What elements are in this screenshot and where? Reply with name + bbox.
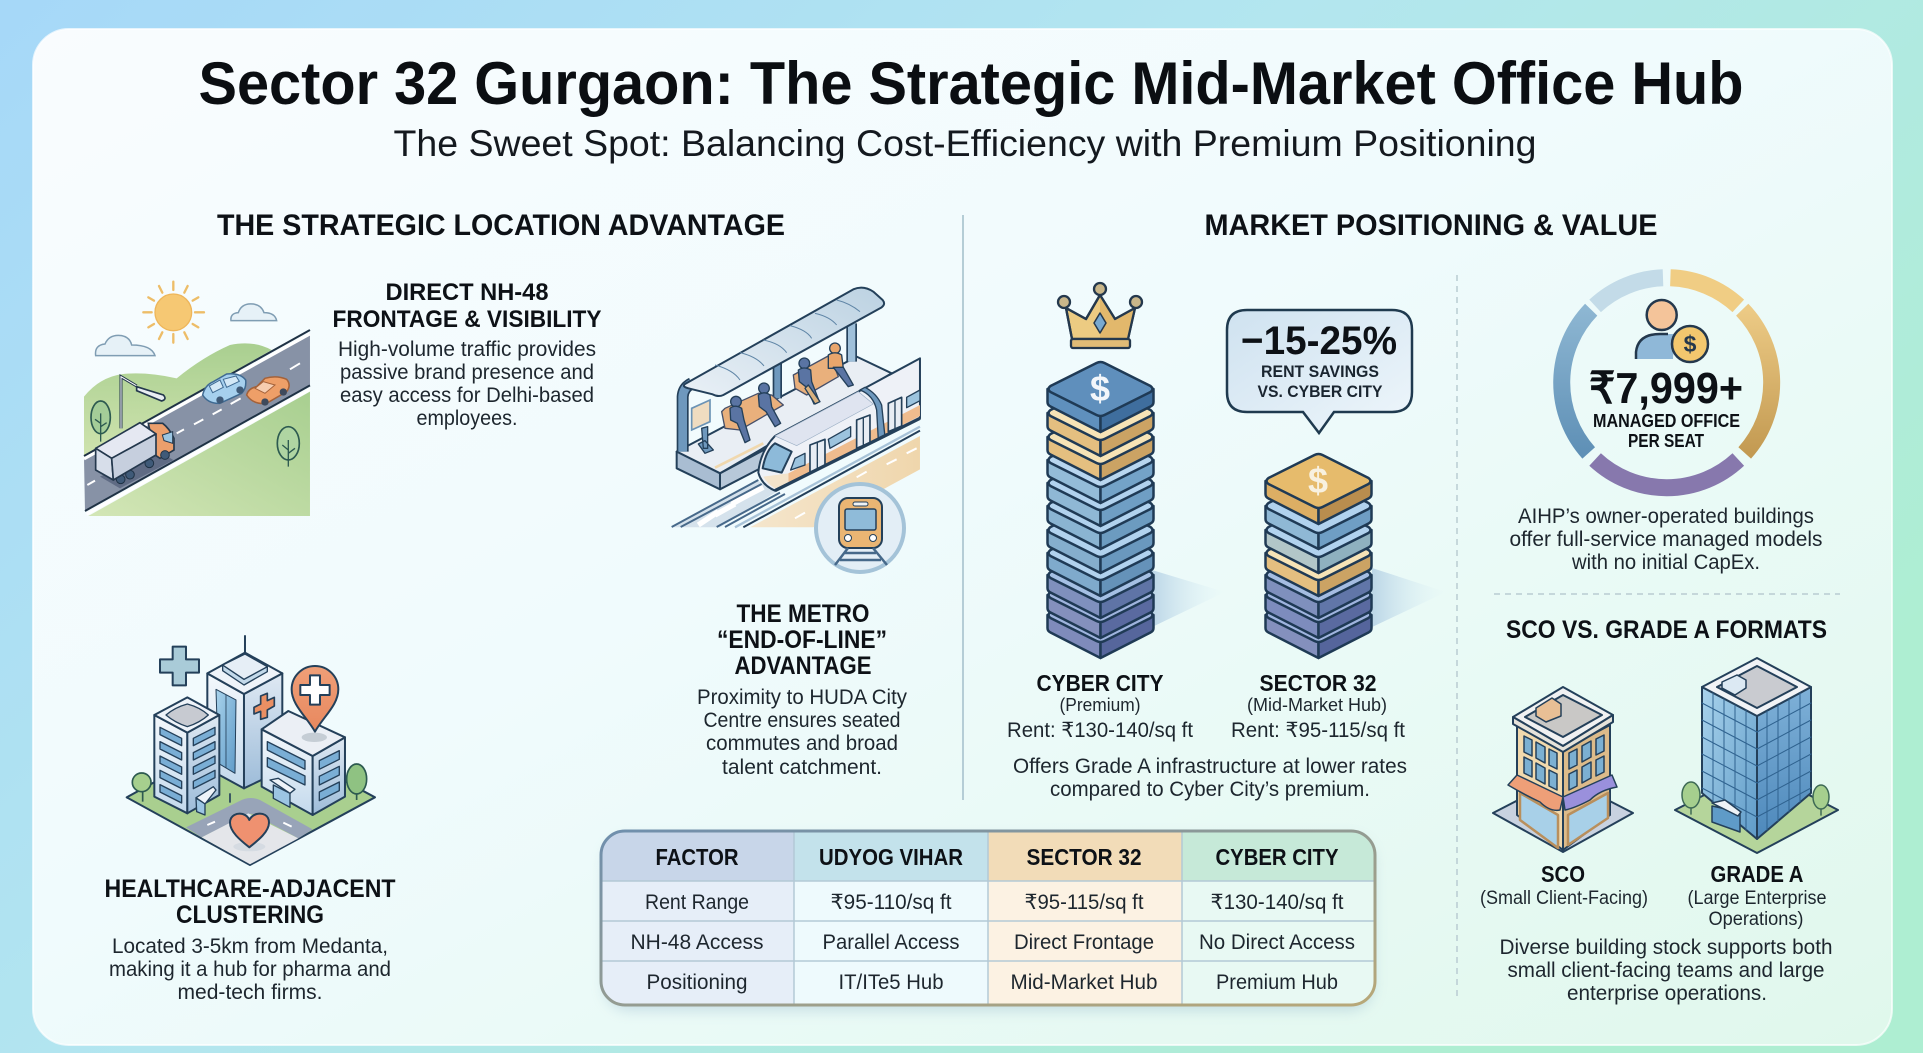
chart: cyber city rent stack (1048, 362, 1225, 658)
text block: diverse stock: small client-facing teams and large (1508, 959, 1824, 982)
heading: SCO vs grade A: SCO VS. GRADE A FORMATS (1506, 616, 1827, 644)
donut: managed office: ₹7,999+ (1589, 364, 1743, 413)
label: sector 32 (1231, 670, 1405, 742)
icon: grade A tower (1675, 658, 1838, 853)
comparison table: Direct Frontage (1014, 931, 1154, 954)
label: SCO: (Small Client-Facing) (1480, 888, 1648, 909)
comparison table: ₹95-115/sq ft (1024, 891, 1144, 914)
text block: healthcare: CLUSTERING (176, 901, 324, 929)
text block: metro (697, 600, 907, 779)
label: grade A: GRADE A (1710, 861, 1804, 887)
donut: managed office (1562, 278, 1772, 488)
text block: healthcare: med-tech firms. (178, 981, 322, 1004)
label: cyber city (1007, 670, 1193, 742)
icon: metro station illustration (672, 288, 920, 527)
label: grade A: (Large Enterprise (1688, 888, 1826, 909)
label: SCO: SCO (1541, 861, 1585, 887)
icon: SCO building (1493, 687, 1633, 852)
label: sector 32: (Mid-Market Hub) (1247, 695, 1387, 715)
comparison table: ₹95-110/sq ft (830, 891, 952, 914)
comparison table: IT/ITe5 Hub (838, 971, 944, 994)
car blue (203, 374, 246, 403)
text block: metro: ADVANTAGE (734, 652, 872, 680)
text block: healthcare: Located 3-5km from Medanta, (112, 935, 388, 958)
icon: crown (1058, 283, 1142, 348)
text block: AIHP: AIHP’s owner-operated buildings (1518, 505, 1814, 528)
car orange (247, 377, 289, 404)
callout: rent savings: VS. CYBER CITY (1258, 382, 1383, 401)
label: sector 32: SECTOR 32 (1260, 670, 1376, 696)
text block: grade A offer: Offers Grade A infrastructure at lower rates (1013, 755, 1407, 778)
center tower (207, 636, 282, 788)
platform (677, 357, 892, 473)
icon: location pin (292, 666, 338, 742)
chart: cyber city rent stack: $ (1090, 368, 1110, 409)
callout: rent savings: −15-25% (1241, 319, 1397, 363)
heading: market positioning: MARKET POSITIONING & VALUE (1204, 209, 1658, 242)
text block: NH-48: DIRECT NH-48 (386, 279, 548, 306)
left building (154, 697, 219, 815)
comparison table: ₹130-140/sq ft (1210, 891, 1344, 914)
text block: metro: commutes and broad (706, 732, 898, 755)
text block: AIHP: with no initial CapEx. (1571, 551, 1760, 574)
canopy (684, 288, 884, 396)
label: cyber city: CYBER CITY (1036, 670, 1164, 696)
right building (262, 711, 345, 815)
sign and kiosk (692, 400, 710, 430)
text block: metro: Proximity to HUDA City (697, 686, 907, 709)
comparison table (601, 831, 1375, 1010)
text block: NH-48: High-volume traffic provides (338, 338, 596, 361)
label: cyber city: Rent: ₹130-140/sq ft (1007, 719, 1193, 742)
comparison table: FACTOR (656, 844, 739, 870)
comparison table: Premium Hub (1216, 971, 1338, 994)
text block: metro: “END-OF-LINE” (717, 626, 887, 654)
donut: managed office: PER SEAT (1628, 431, 1704, 451)
text block: NH-48: FRONTAGE & VISIBILITY (332, 306, 602, 333)
icon: metro train badge (816, 484, 904, 572)
text block: healthcare: HEALTHCARE-ADJACENT (104, 875, 396, 903)
chart: sector 32 rent stack: $ (1308, 460, 1328, 501)
people (730, 358, 820, 443)
title: Sector 32 Gurgaon: The Strategic Mid-Market Office Hub (198, 50, 1744, 117)
text block: NH-48: employees. (416, 407, 518, 430)
callout: rent savings (1227, 310, 1412, 433)
text block: diverse stock (1500, 936, 1832, 1005)
posts (683, 383, 692, 452)
label: cyber city: (Premium) (1060, 695, 1140, 715)
icon: heart (230, 814, 269, 851)
label: grade A (1688, 861, 1826, 930)
callout: rent savings: RENT SAVINGS (1261, 362, 1379, 381)
label: grade A: Operations) (1708, 909, 1804, 930)
text block: diverse stock: enterprise operations. (1567, 982, 1767, 1005)
label: SCO (1480, 861, 1648, 909)
comparison table: Parallel Access (822, 931, 960, 954)
icon: person with coin (1636, 300, 1708, 362)
icon: highway illustration (84, 282, 310, 516)
text block: AIHP: offer full-service managed models (1510, 528, 1822, 551)
icon: sun (143, 282, 204, 343)
label: sector 32: Rent: ₹95-115/sq ft (1231, 719, 1405, 742)
benches (722, 393, 783, 430)
heading: location advantage: THE STRATEGIC LOCATION ADVANTAGE (217, 209, 785, 242)
text block: healthcare: making it a hub for pharma and (109, 958, 391, 981)
truck (100, 450, 173, 488)
text block: NH-48: passive brand presence and (340, 361, 594, 384)
comparison table: No Direct Access (1199, 931, 1355, 954)
comparison table: Rent Range (645, 891, 749, 914)
chart: sector 32 rent stack (1266, 454, 1446, 658)
donut: managed office: MANAGED OFFICE (1593, 411, 1740, 431)
comparison table: Mid-Market Hub (1010, 971, 1158, 994)
subtitle: The Sweet Spot: Balancing Cost-Efficiency with Premium Positioning (394, 123, 1536, 164)
comparison table: UDYOG VIHAR (819, 844, 963, 870)
text block: grade A offer (1013, 755, 1407, 801)
comparison table: NH-48 Access (630, 931, 764, 954)
text block: healthcare (104, 875, 396, 1004)
text block: metro: talent catchment. (722, 756, 882, 779)
text block: grade A offer: compared to Cyber City’s premium. (1050, 778, 1370, 801)
text block: metro: THE METRO (736, 600, 870, 628)
text block: metro: Centre ensures seated (704, 709, 900, 732)
text block: AIHP (1510, 505, 1822, 574)
text block: NH-48: easy access for Delhi-based (340, 384, 594, 407)
icon: medical plus (160, 647, 199, 685)
train (758, 358, 920, 491)
comparison table: Positioning (646, 971, 748, 994)
comparison table: SECTOR 32 (1026, 844, 1142, 870)
icon: person with coin: $ (1684, 331, 1697, 357)
icon: healthcare cluster illustration (127, 636, 375, 865)
comparison table: CYBER CITY (1216, 844, 1338, 870)
text block: NH-48 (332, 279, 602, 430)
text block: diverse stock: Diverse building stock supports both (1500, 936, 1832, 959)
